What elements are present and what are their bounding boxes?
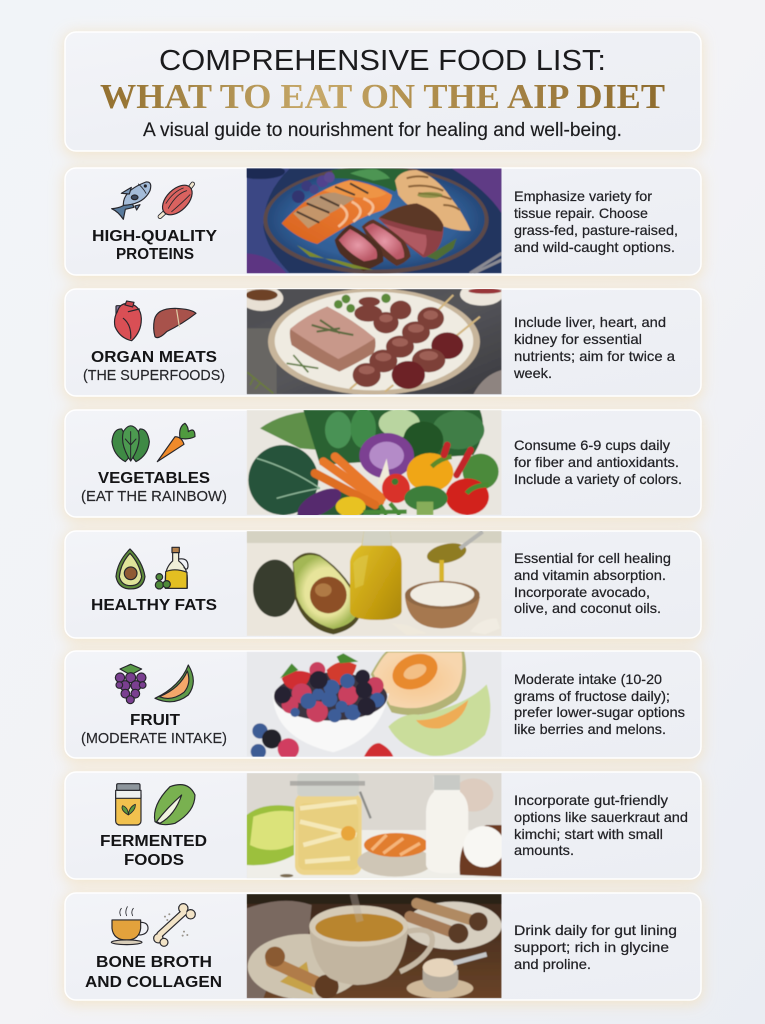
panel: organ meats [65, 283, 701, 396]
panel: high-quality proteins [65, 164, 701, 275]
description [514, 188, 678, 255]
description: and proline. [514, 956, 591, 972]
icons: jar and cabbage [116, 784, 195, 825]
title line: comprehensive food list: COMPREHENSIVE FOOD LIST: [159, 45, 606, 77]
description: Essential for cell healing [514, 550, 671, 566]
category label: VEGETABLES [98, 470, 210, 487]
category label: FERMENTED [100, 833, 207, 850]
category label: HIGH-QUALITY [92, 228, 217, 245]
photo: berries and melon [247, 647, 502, 760]
description [514, 922, 677, 972]
category label: BONE BROTH [96, 954, 212, 971]
photo: sauerkraut, kimchi, kefir [247, 773, 505, 878]
panel: healthy fats [65, 531, 701, 638]
description [514, 671, 685, 737]
description [513, 314, 675, 381]
category label: (THE SUPERFOODS) [83, 368, 225, 384]
photo: cup of bone broth with bones [247, 894, 502, 999]
description: Include liver, heart, and [514, 314, 666, 330]
category label: FOODS [124, 852, 184, 869]
category label: ORGAN MEATS [91, 349, 217, 366]
category label: FRUIT [130, 712, 180, 729]
description: kidney for essential [514, 331, 642, 347]
description [514, 437, 682, 487]
category label: AND COLLAGEN [85, 974, 222, 991]
icons: broth cup and bone [111, 904, 195, 946]
category label [100, 833, 207, 869]
description: kimchi; start with small [514, 826, 663, 842]
panel: bone broth and collagen [65, 893, 701, 1000]
description: nutrients; aim for twice a [514, 348, 675, 364]
description: Include a variety of colors. [514, 471, 682, 487]
photo: salmon, steak and chicken plate [235, 164, 502, 274]
description: support; rich in glycine [514, 939, 669, 955]
panel: vegetables [65, 408, 701, 524]
category label [81, 712, 227, 747]
panel: fruit [65, 647, 701, 760]
description: Moderate intake (10-20 [514, 671, 662, 687]
description: Drink daily for gut lining [514, 922, 677, 938]
description: Emphasize variety for [514, 188, 652, 204]
description: Incorporate avocado, [514, 584, 650, 600]
description: for fiber and antioxidants. [514, 454, 679, 470]
description: amounts. [514, 842, 574, 858]
description: tissue repair. Choose [514, 205, 648, 221]
description: Incorporate gut-friendly [514, 792, 668, 808]
description: olive, and coconut oils. [514, 600, 661, 616]
description [514, 792, 688, 858]
header panel [65, 32, 701, 151]
category label [92, 228, 217, 263]
category label [81, 470, 227, 505]
description: Consume 6-9 cups daily [514, 437, 670, 453]
description: grams of fructose daily); [514, 688, 670, 704]
category label: (MODERATE INTAKE) [81, 731, 227, 747]
description [514, 550, 671, 616]
category label: (EAT THE RAINBOW) [81, 489, 227, 505]
subtitle: A visual guide to nourishment for healing and well-being. [143, 120, 622, 141]
photo: liver pate and heart skewers [240, 283, 503, 395]
title line: what to eat on the AIP diet: WHAT TO EAT ON THE AIP DIET [100, 77, 665, 116]
description: week. [513, 365, 552, 381]
icons: berries and melon [115, 664, 193, 704]
description: options like sauerkraut and [514, 809, 688, 825]
panel: fermented foods [65, 772, 701, 879]
category label [83, 349, 225, 384]
category label [85, 954, 222, 991]
description: and wild-caught options. [514, 239, 675, 255]
category label: HEALTHY FATS [91, 597, 217, 614]
icons: avocado and oil bottle [116, 547, 188, 589]
description: and vitamin absorption. [514, 567, 666, 583]
photo: rainbow vegetables [247, 408, 502, 524]
description: like berries and melons. [514, 721, 666, 737]
description: grass-fed, pasture-raised, [514, 222, 678, 238]
category label: PROTEINS [116, 246, 194, 263]
icons: heart and liver [115, 301, 196, 341]
icons: spinach and carrot [112, 423, 195, 462]
photo: avocado, olive oil and coconut [247, 531, 502, 636]
icons: fish and muscle [112, 180, 198, 220]
description: prefer lower-sugar options [514, 704, 685, 720]
